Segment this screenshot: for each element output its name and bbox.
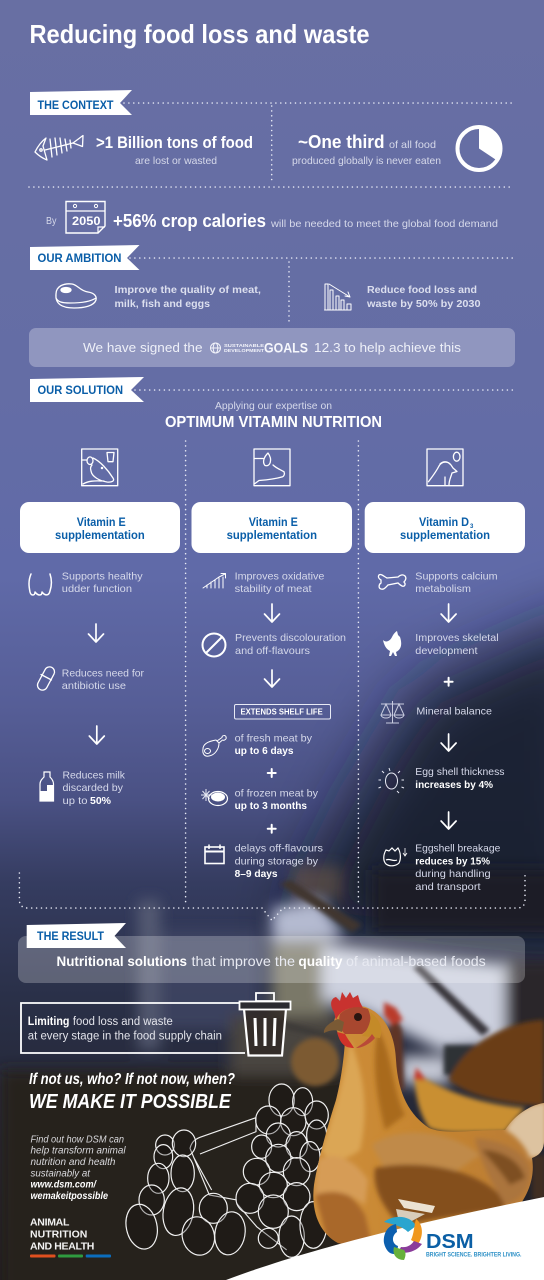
step: eggshell breakage: [384, 843, 500, 893]
column 2: pig: [192, 449, 352, 880]
ambition: reduce waste: Reduce food loss and: [367, 284, 477, 296]
step: eggshell breakage: reduces by 15%: [415, 856, 491, 868]
background shading at right: [290, 610, 544, 960]
step: milk discarded: [40, 770, 126, 807]
egg carton line drawing: [122, 1084, 328, 1259]
step: udder function: udder function: [62, 583, 132, 595]
call to action: [29, 1071, 235, 1113]
label: extends shelf life: [234, 704, 330, 719]
step: mineral balance: [381, 701, 492, 723]
stat: one third: ~One third: [298, 132, 384, 152]
text block: find out more: www.dsm.com/: [30, 1180, 97, 1191]
step: off-flavours delay: 8–9 days: [235, 868, 278, 880]
step: milk discarded: 50%: [90, 795, 112, 807]
crop calories statement: By: [46, 215, 57, 227]
step: udder function: Supports healthy: [62, 570, 143, 582]
banner: our ambition: OUR AMBITION: [38, 251, 122, 265]
label: animal nutrition and health: AND HEALTH: [30, 1241, 94, 1253]
step: frozen meat: [201, 788, 319, 812]
step: milk discarded: discarded by: [62, 782, 124, 794]
arrow: [264, 604, 280, 622]
ambition: reduce waste: [366, 284, 481, 310]
card: vitamin E: Vitamin E: [249, 515, 298, 529]
section: our ambition: [30, 245, 513, 324]
icon: calendar 2050: 2050: [72, 214, 101, 228]
panel: result statement: quality: [298, 953, 343, 969]
stat: one third: [292, 132, 441, 167]
panel: result statement: that improve the: [192, 953, 295, 969]
crop calories statement: [46, 202, 498, 233]
text block: find out more: nutrition and health: [30, 1157, 116, 1168]
label: extends shelf life: EXTENDS SHELF LIFE: [240, 708, 323, 717]
card: vitamin D3: Vitamin D: [419, 515, 469, 529]
panel: sustainable development goals pledge: SUSTAINABLE: [224, 343, 265, 349]
step: prevents discolouration: Prevents discolouration: [235, 632, 346, 644]
step: prevents discolouration: [202, 632, 346, 657]
step: fresh meat: of fresh meat by: [235, 733, 313, 745]
logo: DSM: BRIGHT SCIENCE. BRIGHTER LIVING.: [426, 1252, 522, 1259]
hen photo illustration: [313, 992, 544, 1260]
banner: our solution: [30, 377, 144, 402]
step: fresh meat: [203, 733, 313, 757]
crop calories statement: +56% crop calories: [113, 210, 266, 231]
step: skeletal development: development: [415, 645, 478, 657]
step: mineral balance: Mineral balance: [416, 706, 492, 718]
banner: our ambition: [30, 245, 140, 270]
background photo: beams and blurred hens: [272, 880, 544, 1200]
background photo: blurred barn: [0, 866, 544, 1280]
callout: limiting food loss: food loss and waste: [73, 1016, 173, 1028]
section: our solution heading: [30, 377, 513, 431]
ambition: quality: Improve the quality of meat,: [114, 284, 261, 296]
crop calories statement: will be needed to meet the global food demand: [270, 218, 498, 230]
card: vitamin E: [20, 502, 180, 553]
banner: the context: THE CONTEXT: [38, 98, 114, 112]
step: milk discarded: up to: [62, 795, 88, 807]
card: vitamin D3: [365, 502, 525, 553]
step: egg shell thickness: increases by 4%: [415, 779, 494, 791]
step: egg shell thickness: Egg shell thickness: [415, 766, 504, 778]
text block: find out more: Find out how DSM can: [30, 1134, 124, 1145]
section: the context: [29, 90, 513, 187]
panel: result statement: [18, 936, 525, 983]
icon: declining bar chart: [324, 284, 351, 310]
icon: trash bin: [240, 993, 290, 1056]
section: our solution heading: Applying our expertise on: [215, 400, 332, 412]
ambition: quality: [114, 284, 261, 310]
step: fresh meat: up to 6 days: [235, 745, 294, 757]
callout: limiting food loss: at every stage in the food supply chain: [28, 1030, 222, 1042]
stat: one third: produced globally is never eaten: [292, 155, 441, 167]
step: antibiotic use: antibiotic use: [62, 680, 126, 692]
stat: one billion tons: [96, 134, 253, 167]
ambition: quality: milk, fish and eggs: [114, 298, 210, 310]
step: off-flavours delay: [205, 843, 323, 880]
plus: [268, 825, 276, 833]
title: Reducing food loss and waste: [30, 19, 370, 49]
card: vitamin E: Vitamin E: [77, 515, 126, 529]
banner: the context: [30, 90, 132, 115]
arrow: [264, 670, 280, 687]
callout: limiting food loss: [21, 993, 290, 1056]
step: egg shell thickness: [378, 766, 504, 793]
banner: the result: THE RESULT: [37, 929, 105, 943]
text block: find out more: wemakeitpossible: [30, 1191, 108, 1202]
plus: [445, 678, 453, 686]
step: milk discarded: Reduces milk: [62, 770, 126, 782]
step: calcium metabolism: [378, 570, 498, 595]
ambition: reduce waste: waste by 50% by 2030: [366, 298, 481, 310]
panel: sustainable development goals pledge: DEVELOPMENT: [224, 348, 264, 354]
step: eggshell breakage: Eggshell breakage: [415, 843, 500, 855]
plus: [268, 769, 276, 777]
icon: fish skeleton: [35, 136, 83, 160]
icon: chicken head and egg: [427, 449, 463, 486]
arrow: [441, 812, 456, 829]
panel: sustainable development goals pledge: 12.3 to help achieve this: [314, 340, 462, 355]
card: vitamin E: [192, 502, 352, 553]
text block: find out more: help transform animal: [30, 1146, 126, 1157]
step: oxidative stability: Improves oxidative: [235, 570, 325, 582]
step: frozen meat: of frozen meat by: [235, 788, 319, 800]
step: oxidative stability: [203, 570, 325, 595]
step: prevents discolouration: and off-flavours: [235, 645, 310, 657]
column 3: poultry: [365, 449, 525, 893]
icon: pig head: [254, 449, 290, 486]
step: off-flavours delay: during storage by: [235, 856, 319, 868]
column 1: cow: [20, 449, 180, 807]
step: frozen meat: up to 3 months: [235, 800, 307, 812]
stat: one billion tons: >1 Billion tons of food: [96, 134, 253, 152]
banner: our solution: OUR SOLUTION: [38, 383, 123, 397]
white corner wave: [226, 1197, 544, 1280]
icon: cow head: [82, 449, 118, 486]
panel: sustainable development goals pledge: We have signed the: [83, 340, 202, 355]
panel: sustainable development goals pledge: [29, 328, 515, 367]
arrow: [441, 734, 456, 751]
arrow: [88, 624, 104, 642]
callout: limiting food loss: Limiting: [28, 1016, 69, 1028]
text block: find out more: sustainably at: [30, 1168, 91, 1179]
banner: the result: [27, 923, 126, 948]
label: animal nutrition and health: ANIMAL: [30, 1217, 70, 1229]
card: vitamin D3: supplementation: [400, 528, 490, 542]
panel: sustainable development goals pledge: GOALS: [264, 340, 308, 356]
arrow: [89, 726, 104, 744]
step: skeletal development: Improves skeletal: [415, 632, 499, 644]
card: vitamin E: supplementation: [227, 528, 317, 542]
icon: UN globe: [210, 343, 220, 353]
stat: one third: of all food: [389, 139, 436, 151]
step: antibiotic use: Reduces need for: [62, 668, 144, 680]
logo: DSM: [384, 1217, 522, 1260]
panel: result statement: of animal-based foods: [346, 953, 486, 969]
label: animal nutrition and health: NUTRITION: [30, 1229, 87, 1241]
card: vitamin D3: 3: [470, 524, 474, 530]
panel: result statement: Nutritional solutions: [56, 953, 187, 969]
call to action: If not us, who? If not now, when?: [29, 1071, 235, 1088]
logo mark: [384, 1217, 422, 1260]
step: skeletal development: [383, 631, 499, 657]
logo: DSM: DSM: [426, 1230, 474, 1253]
section: our solution heading: OPTIMUM VITAMIN NUTRITION: [165, 414, 382, 431]
card: vitamin E: supplementation: [55, 528, 145, 542]
step: calcium metabolism: Supports calcium: [415, 570, 498, 582]
hen head: [324, 992, 381, 1048]
step: oxidative stability: stability of meat: [235, 583, 312, 595]
label: animal nutrition and health: [30, 1217, 111, 1258]
arrow: [441, 604, 456, 622]
step: udder function: [29, 570, 143, 595]
call to action: WE MAKE IT POSSIBLE: [29, 1090, 232, 1113]
step: eggshell breakage: during handling: [415, 868, 491, 880]
icon: calendar 2050: [66, 202, 105, 233]
icon: pie chart one third: [458, 127, 501, 170]
text block: find out more: [30, 1134, 126, 1202]
step: eggshell breakage: and transport: [415, 881, 481, 893]
step: off-flavours delay: delays off-flavours: [235, 843, 323, 855]
step: calcium metabolism: metabolism: [415, 583, 471, 595]
step: antibiotic use: [36, 665, 144, 692]
stat: one billion tons: are lost or wasted: [135, 155, 217, 167]
icon: steak: [56, 284, 96, 308]
